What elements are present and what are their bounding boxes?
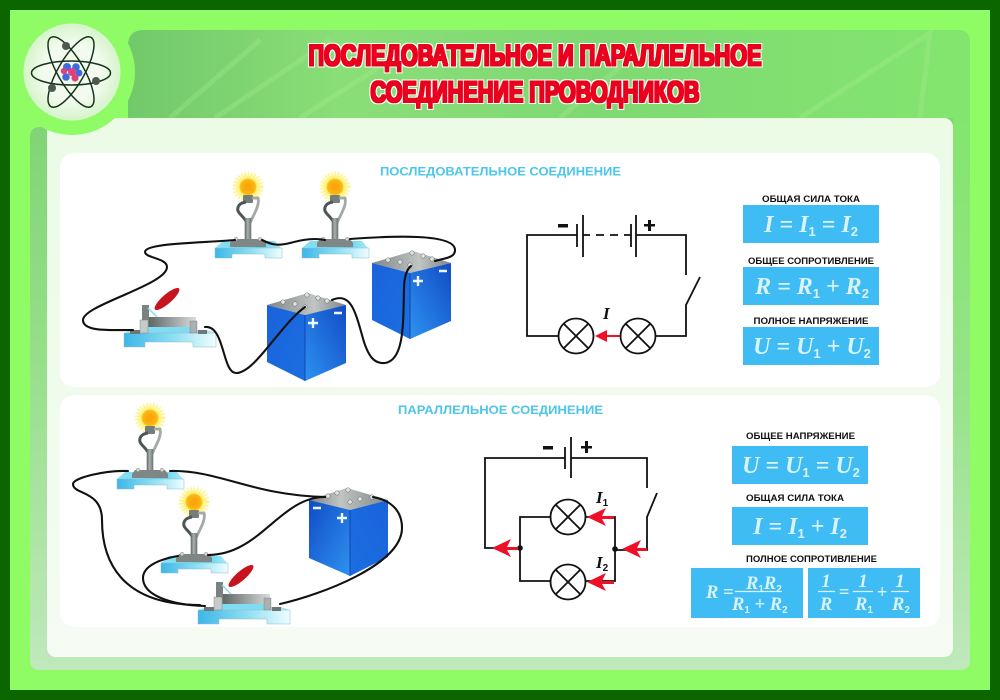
title [308,40,762,109]
formulas: parallel: = [839,583,849,603]
emblem: atom [24,24,135,135]
formulas: parallel: 1 [821,572,831,592]
formulas: parallel: ОБЩАЯ СИЛА ТОКА [746,493,844,504]
series circuit diagram: I [602,304,611,323]
formulas: parallel: 2 [840,526,847,541]
formulas: series: + R [820,274,862,300]
formulas: parallel: 1 [858,572,868,592]
formulas: series: 1 [808,224,816,239]
formulas: parallel: ОБЩЕЕ НАПРЯЖЕНИЕ [746,431,855,442]
parallel wiring picture [73,402,402,624]
formulas: parallel: 1 [802,465,810,480]
formulas: parallel: 1 [744,605,750,616]
formulas: series: ОБЩАЯ СИЛА ТОКА [762,194,860,205]
formulas: parallel: R [855,595,867,615]
formulas: series: ОБЩЕЕ СОПРОТИВЛЕНИЕ [748,256,874,267]
content panel [47,118,953,657]
formulas: parallel: 1 [867,605,873,616]
formulas: series: = I [816,212,852,238]
formulas: parallel: 1 [758,584,764,595]
formulas: parallel: + I [805,514,841,540]
formulas: parallel: I = I [753,514,797,540]
title: СОЕДИНЕНИЕ ПРОВОДНИКОВ [370,76,700,109]
panel: series connection [60,153,940,387]
formulas: parallel: 2 [776,584,782,595]
parallel circuit diagram: 1 [603,498,609,509]
formulas: parallel: U = U [742,453,802,479]
parallel circuit diagram [485,437,657,600]
heading: series: ПОСЛЕДОВАТЕЛЬНОЕ СОЕДИНЕНИЕ [380,164,621,178]
formulas: series: R = R [755,274,813,300]
formulas: series [743,194,879,365]
heading: parallel: ПАРАЛЛЕЛЬНОЕ СОЕДИНЕНИЕ [398,403,603,417]
formulas: parallel: 2 [853,465,860,480]
formulas: parallel: R [892,595,904,615]
formulas: parallel: = U [810,453,854,479]
formulas: parallel: + R [750,595,782,615]
formulas: parallel: 1 [797,526,805,541]
title: ПОСЛЕДОВАТЕЛЬНОЕ И ПАРАЛЛЕЛЬНОЕ [308,40,762,72]
parallel circuit diagram: 2 [603,563,609,574]
formulas: series: I = I [764,212,808,238]
formulas: parallel: R = [705,583,734,603]
formulas: series: + U [821,334,865,360]
formulas: parallel: ПОЛНОЕ СОПРОТИВЛЕНИЕ [746,554,877,565]
formulas: parallel: 1 [895,572,905,592]
formulas: parallel: R [763,574,776,594]
formulas: series: 2 [851,224,858,239]
formulas: series: U = U [753,334,813,360]
formulas: parallel [691,431,920,618]
formulas: series: 2 [864,346,871,361]
formulas: parallel: R [746,574,758,594]
formulas: series: ПОЛНОЕ НАПРЯЖЕНИЕ [754,316,868,327]
formulas: series: 1 [813,286,820,301]
formulas: series: 1 [813,346,821,361]
parallel circuit diagram: I [596,488,603,507]
series wiring picture [83,171,455,381]
formulas: parallel: R [819,595,832,615]
formulas: series: 2 [862,286,869,301]
formulas: parallel: + [877,583,887,603]
panel: parallel connection [60,395,940,627]
formulas: parallel: 2 [782,605,788,616]
formulas: parallel: 2 [904,605,910,616]
series circuit diagram [527,215,700,354]
parallel circuit diagram: I [596,553,603,572]
formulas: parallel: R [732,595,744,615]
